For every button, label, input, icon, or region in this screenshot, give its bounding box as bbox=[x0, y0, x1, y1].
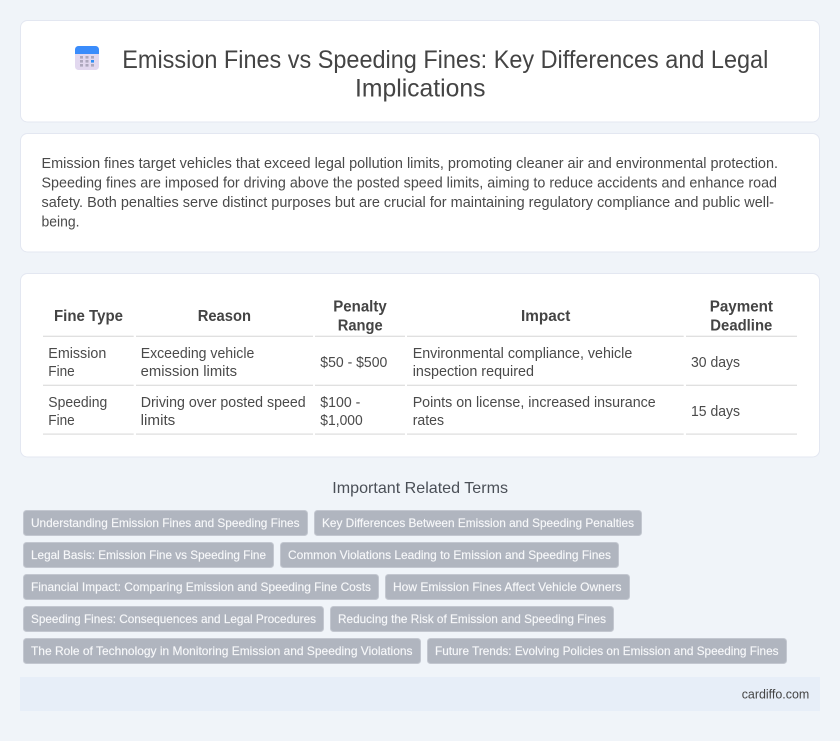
title bbox=[122, 46, 768, 102]
table row: emission fine: $50 - $500 bbox=[320, 355, 387, 371]
description text bbox=[42, 156, 778, 230]
table header row: Impact bbox=[521, 308, 571, 325]
chip row 2 bbox=[24, 542, 618, 568]
table header row: Range bbox=[338, 318, 383, 335]
chip row 5: Future Trends: Evolving Policies on Emission and Speeding Fines bbox=[435, 644, 778, 658]
description text: Speeding fines are imposed for driving above the posted speed limits, aiming to reduce accidents and enhance road bbox=[42, 175, 777, 191]
table row: speeding fine: Fine bbox=[48, 413, 75, 429]
chip row 1: Key Differences Between Emission and Speeding Penalties bbox=[322, 516, 634, 530]
chip row 4: Speeding Fines: Consequences and Legal Procedures bbox=[31, 612, 316, 626]
description text: being. bbox=[42, 214, 80, 230]
table row: emission fine: 30 days bbox=[691, 355, 740, 371]
table row: speeding fine: limits bbox=[141, 413, 175, 429]
table row: emission fine: inspection required bbox=[413, 364, 534, 380]
table row: emission fine: Exceeding vehicle bbox=[141, 346, 254, 362]
table row: speeding fine: Driving over posted speed bbox=[141, 395, 306, 411]
table row: speeding fine: $100 - bbox=[320, 395, 360, 411]
panel: header bbox=[20, 20, 820, 122]
chip row 2: Common Violations Leading to Emission and Speeding Fines bbox=[288, 548, 611, 562]
chip row 3: Financial Impact: Comparing Emission and Speeding Fine Costs bbox=[31, 580, 371, 594]
chip row 1 bbox=[24, 510, 642, 536]
table row: emission fine: Emission bbox=[48, 346, 106, 362]
description text: safety. Both penalties serve distinct purposes but are crucial for maintaining regulatory compliance and public well- bbox=[42, 195, 774, 211]
title: Emission Fines vs Speeding Fines: Key Differences and Legal bbox=[122, 46, 768, 74]
footer source text: cardiffo.com bbox=[742, 686, 809, 701]
table header row: Fine Type bbox=[54, 308, 123, 325]
chip row 3: How Emission Fines Affect Vehicle Owners bbox=[393, 580, 622, 594]
chip row 3 bbox=[24, 574, 630, 600]
title: Implications bbox=[355, 74, 486, 102]
panel: footer bbox=[20, 677, 820, 711]
chip row 1: Understanding Emission Fines and Speeding Fines bbox=[31, 516, 300, 530]
table row: speeding fine: Speeding bbox=[48, 395, 107, 411]
table header row bbox=[54, 299, 774, 335]
chip row 5 bbox=[24, 638, 786, 664]
table row: speeding fine: rates bbox=[413, 413, 444, 429]
chip row 4: Reducing the Risk of Emission and Speeding Fines bbox=[338, 612, 606, 626]
table header row: Penalty bbox=[333, 299, 387, 316]
table row: emission fine bbox=[48, 346, 740, 380]
chip row 4 bbox=[24, 606, 614, 632]
panel: related term chips bbox=[24, 510, 786, 664]
table row: emission fine: Fine bbox=[48, 364, 75, 380]
table header row: Reason bbox=[198, 308, 251, 325]
table row: speeding fine: Points on license, increased insurance bbox=[413, 395, 656, 411]
table header row: Payment bbox=[710, 299, 774, 316]
panel: comparison table bbox=[20, 274, 820, 457]
table row: speeding fine bbox=[48, 395, 740, 429]
table row: speeding fine: 15 days bbox=[691, 404, 740, 420]
table header row: Deadline bbox=[710, 318, 772, 335]
table row: speeding fine: $1,000 bbox=[320, 413, 363, 429]
description text: Emission fines target vehicles that exceed legal pollution limits, promoting cleaner air and environmental protection. bbox=[42, 156, 778, 172]
chip row 5: The Role of Technology in Monitoring Emission and Speeding Violations bbox=[31, 644, 412, 658]
heading: important related terms: Important Related Terms bbox=[332, 480, 508, 497]
table row: emission fine: Environmental compliance, vehicle bbox=[413, 346, 632, 362]
panel: description bbox=[20, 134, 820, 252]
icon: calendar bbox=[75, 46, 99, 70]
table row: emission fine: emission limits bbox=[141, 364, 237, 380]
chip row 2: Legal Basis: Emission Fine vs Speeding Fine bbox=[31, 548, 266, 562]
